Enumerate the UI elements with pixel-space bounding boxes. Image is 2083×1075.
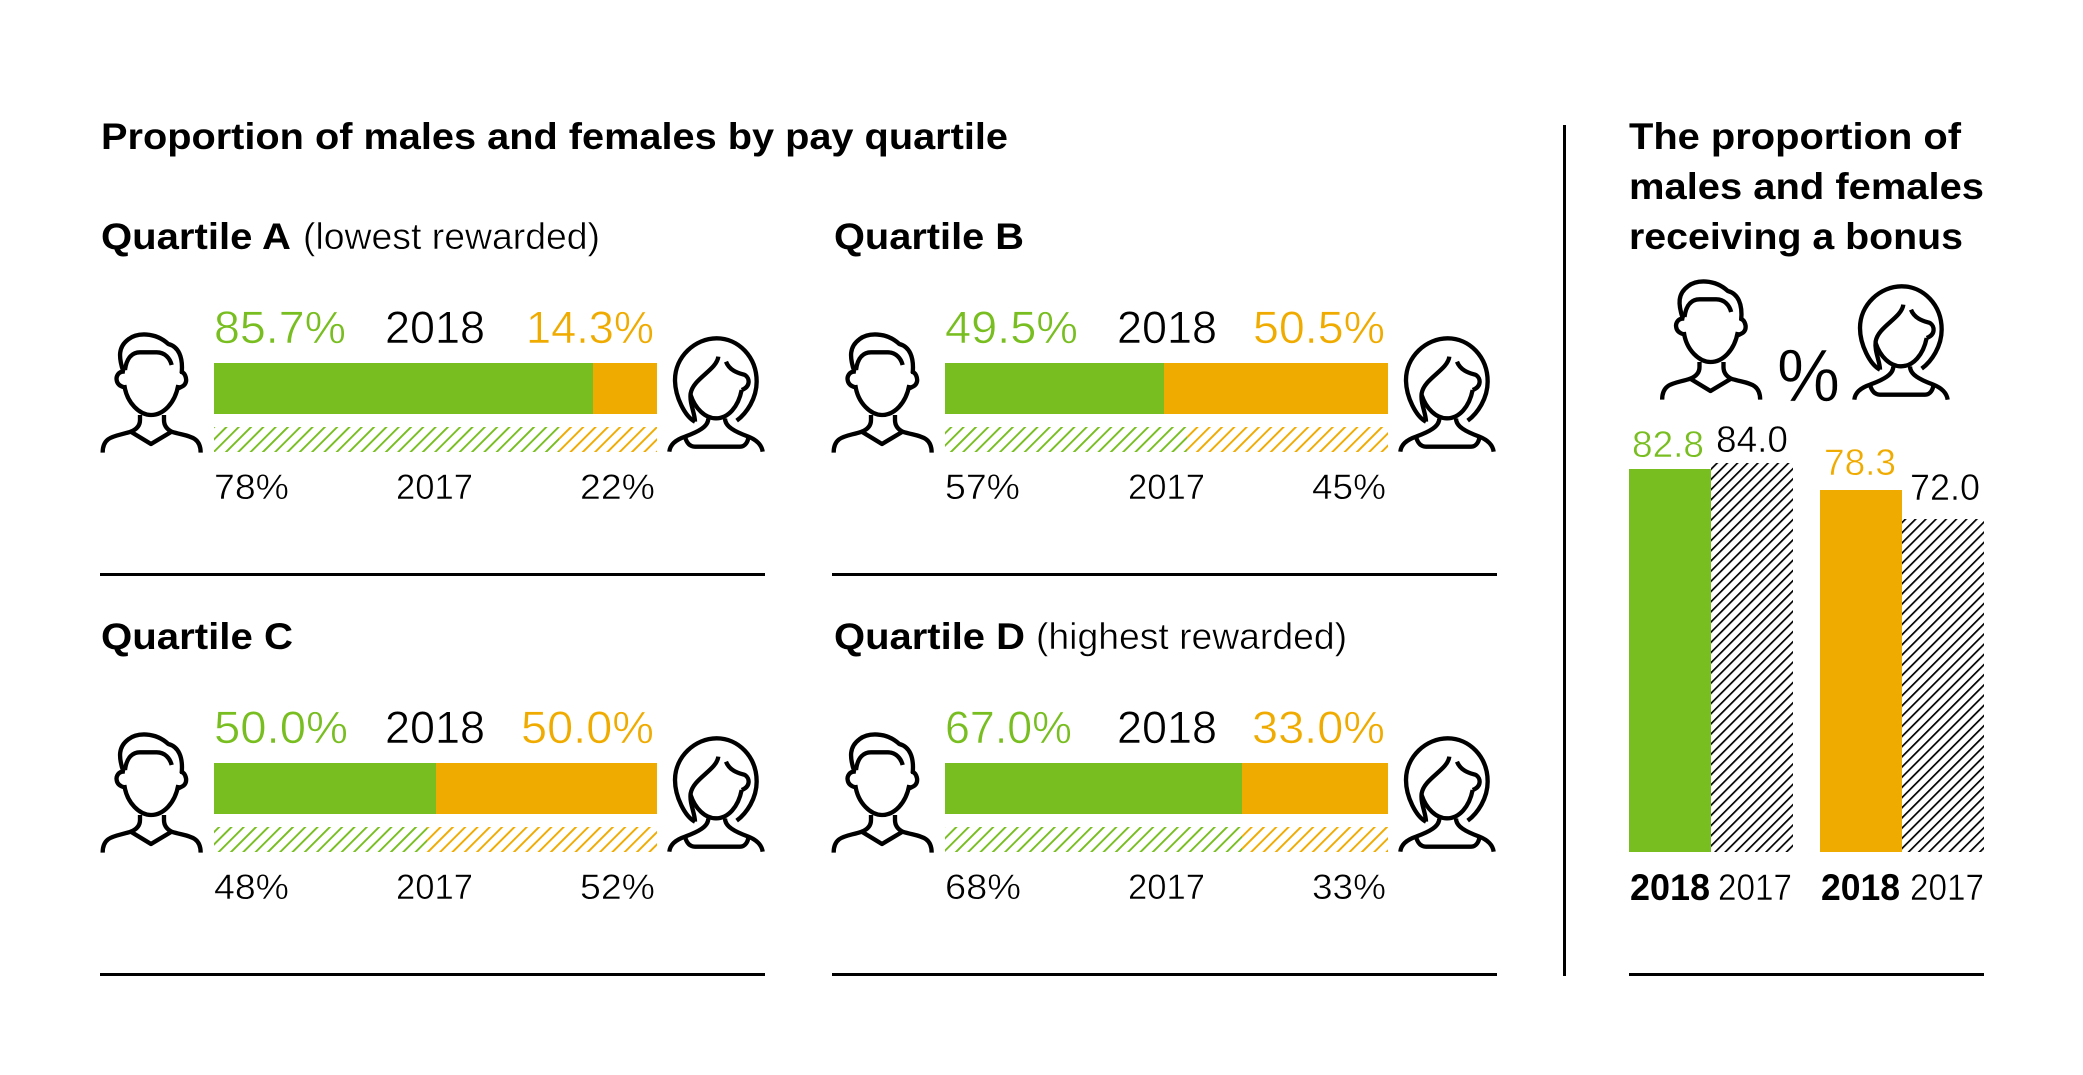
value: male 2017: 68% xyxy=(945,868,1021,907)
value: male 2018: 82.8 xyxy=(1632,424,1704,465)
label: 2018 male: 2018 xyxy=(1630,867,1710,908)
label: 2017 female: 2017 xyxy=(1910,867,1984,908)
value: female 2018: 78.3 xyxy=(1824,442,1896,483)
label: 2018: 2018 xyxy=(385,302,485,353)
bar: 2018 split xyxy=(945,363,1388,414)
label: 2018 female: 2018 xyxy=(1821,867,1900,908)
bar: 2017 split xyxy=(214,427,657,452)
icon: female xyxy=(669,738,763,852)
icon: male xyxy=(1662,281,1760,400)
bar: male 2018 xyxy=(1629,469,1711,852)
icon: female xyxy=(1854,286,1948,400)
panel: quartile C xyxy=(101,616,763,907)
label: 2018: 2018 xyxy=(385,702,485,753)
bar: 2018 split xyxy=(214,763,657,814)
bar: 2018 split xyxy=(945,763,1388,814)
label: 2018: 2018 xyxy=(1117,702,1217,753)
bar: female 2017 xyxy=(1902,519,1984,852)
heading: bonus: males and females xyxy=(1629,166,1984,207)
value: male 2018: 67.0% xyxy=(945,702,1072,753)
bar: male 2017 xyxy=(1711,463,1793,852)
value: female 2018: 33.0% xyxy=(1252,702,1385,753)
panel: quartile A xyxy=(101,216,763,507)
value: female 2018: 14.3% xyxy=(526,302,654,353)
label: 2017 male: 2017 xyxy=(1718,867,1792,908)
bar: 2017 split xyxy=(214,827,657,852)
heading: quartile B: Quartile B xyxy=(834,216,1024,257)
percent sign: % xyxy=(1777,334,1840,417)
value: female 2017: 22% xyxy=(580,468,655,507)
title: Proportion of males and females by pay quartile xyxy=(101,116,1008,157)
label: 2018: 2018 xyxy=(1117,302,1217,353)
icon: female xyxy=(1400,738,1494,852)
panel: bonus xyxy=(1629,116,1984,908)
bar: female 2018 xyxy=(1820,490,1902,852)
bar: 2017 split xyxy=(945,427,1388,452)
heading: bonus: The proportion of xyxy=(1629,116,1962,157)
icon: female xyxy=(1400,338,1494,452)
panel: quartile D xyxy=(834,616,1494,907)
panel: quartile B xyxy=(834,216,1494,507)
subheading: lowest rewarded: (lowest rewarded) xyxy=(303,216,600,257)
value: male 2017: 57% xyxy=(945,468,1020,507)
value: female 2018: 50.5% xyxy=(1253,302,1385,353)
icon: female xyxy=(669,338,763,452)
value: female 2018: 50.0% xyxy=(521,702,654,753)
value: male 2017: 48% xyxy=(214,868,289,907)
label: 2017: 2017 xyxy=(1128,868,1205,907)
label: 2017: 2017 xyxy=(1128,468,1205,507)
value: female 2017: 52% xyxy=(580,868,655,907)
value: female 2017: 33% xyxy=(1312,868,1386,907)
heading: quartile A: Quartile A xyxy=(101,216,291,257)
value: female 2017: 45% xyxy=(1312,468,1386,507)
subheading: highest rewarded: (highest rewarded) xyxy=(1036,616,1347,657)
icon: male xyxy=(103,734,201,853)
value: male 2017: 78% xyxy=(214,468,289,507)
value: female 2017: 72.0 xyxy=(1910,467,1980,508)
icon: male xyxy=(834,334,932,453)
bar: 2017 split xyxy=(945,827,1388,852)
icon: male xyxy=(834,734,932,853)
value: male 2017: 84.0 xyxy=(1716,419,1788,460)
value: male 2018: 49.5% xyxy=(945,302,1078,353)
label: 2017: 2017 xyxy=(396,868,473,907)
value: male 2018: 85.7% xyxy=(214,302,346,353)
value: male 2018: 50.0% xyxy=(214,702,348,753)
heading: quartile C: Quartile C xyxy=(101,616,293,657)
icon: male xyxy=(103,334,201,453)
bar: 2018 split xyxy=(214,363,657,414)
heading: quartile D: Quartile D xyxy=(834,616,1025,657)
label: 2017: 2017 xyxy=(396,468,473,507)
heading: bonus: receiving a bonus xyxy=(1629,216,1963,257)
